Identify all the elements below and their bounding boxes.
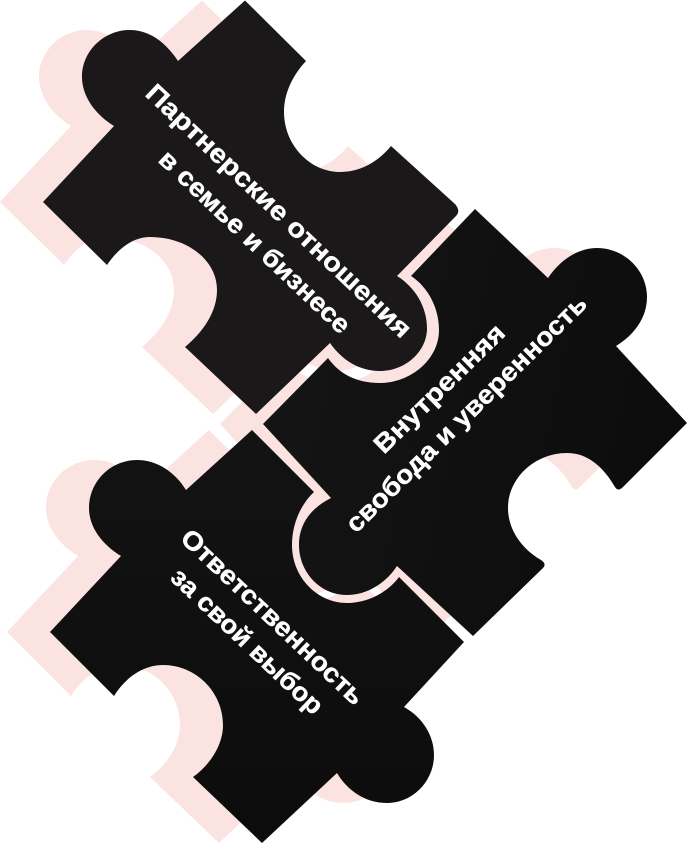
puzzle piece: inner freedom <box>263 209 687 636</box>
label: inner freedom: Внутренняя <box>367 317 511 459</box>
label: inner freedom: свобода и уверенность <box>339 288 593 538</box>
label: responsibility: за свой выбор <box>165 562 330 720</box>
puzzle piece: partner relations <box>43 0 458 414</box>
label: partner relations: в семье и бизнесе <box>153 144 357 340</box>
label: partner relations: Партнерские отношения <box>140 78 418 344</box>
label: responsibility: Ответственность <box>175 523 371 711</box>
puzzle piece: responsibility <box>50 430 464 843</box>
